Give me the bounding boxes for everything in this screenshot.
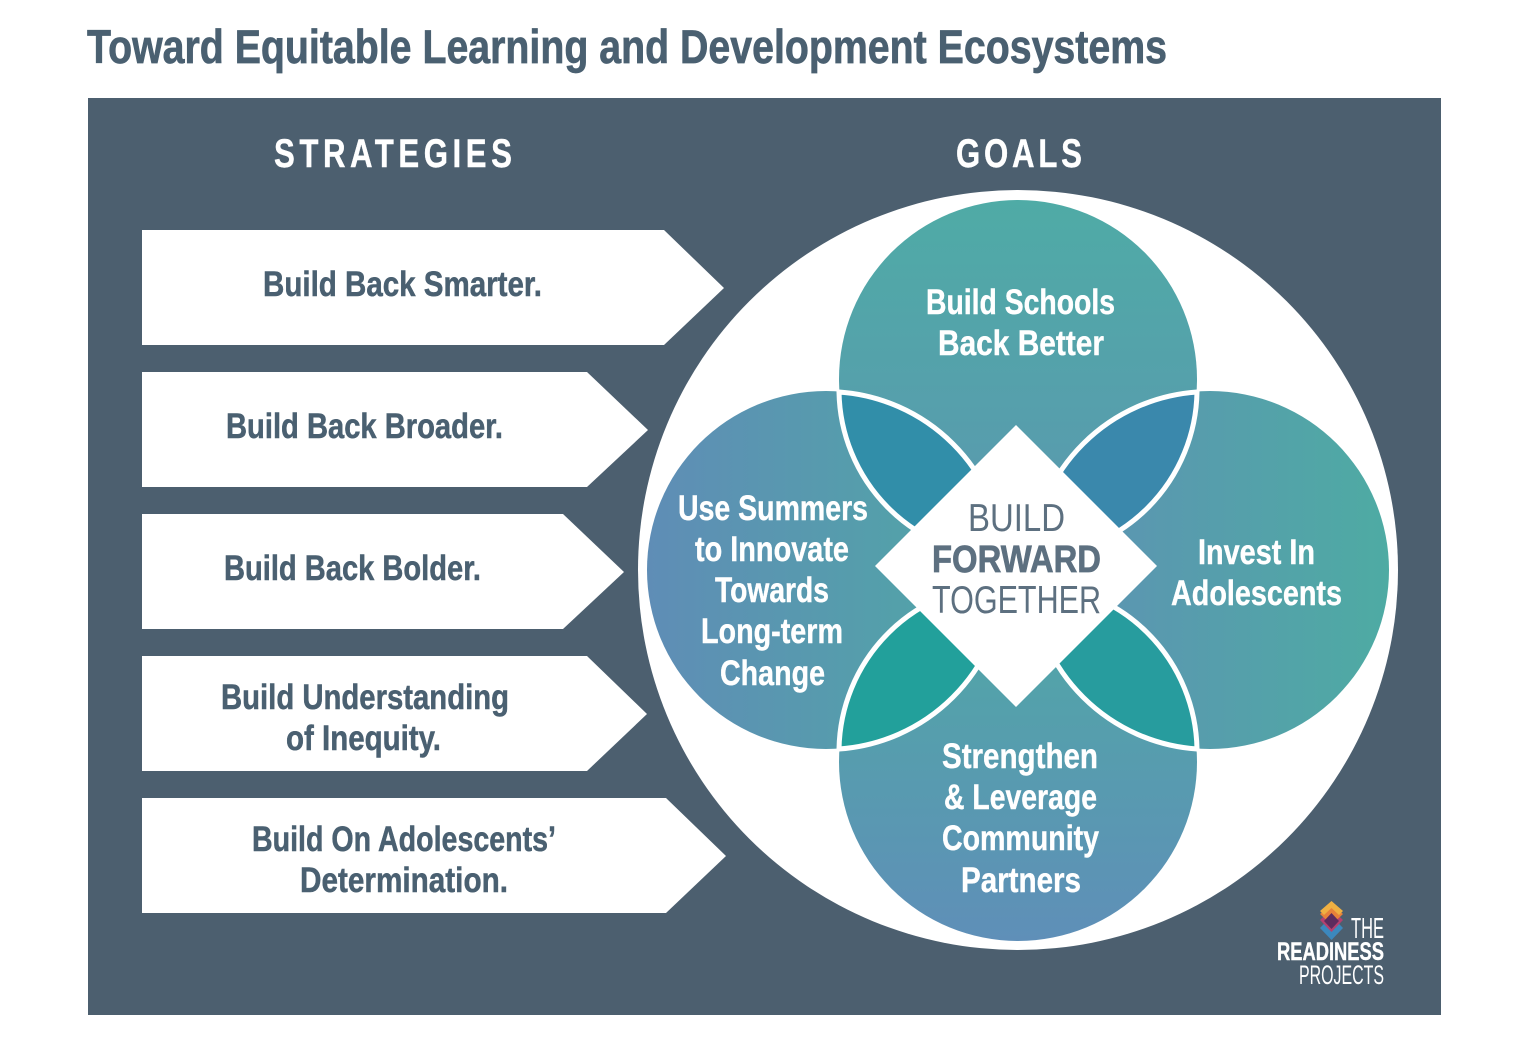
logo text: THE bbox=[1351, 913, 1384, 945]
title: Toward Equitable Learning and Development Ecosystems bbox=[87, 20, 1167, 73]
arrow: build back smarter: Build Back Smarter. bbox=[263, 265, 542, 304]
goal text: invest in adolescents bbox=[1171, 533, 1342, 613]
arrow: build back smarter bbox=[142, 230, 724, 345]
goal text: invest in adolescents: Adolescents bbox=[1171, 574, 1342, 613]
panel: dark background bbox=[88, 98, 1441, 1015]
heading: goals: GOALS bbox=[956, 131, 1082, 176]
center label bbox=[932, 497, 1101, 622]
goal text: build schools back better: Build Schools bbox=[926, 283, 1115, 322]
arrow: build back bolder bbox=[142, 514, 624, 629]
arrow: build on adolescents' determination bbox=[142, 798, 726, 913]
icon: stacked diamonds bbox=[1320, 901, 1343, 940]
goals diagram: white circle with overlapping goal circles bbox=[638, 190, 1398, 950]
goal text: build schools back better bbox=[926, 283, 1115, 363]
goal text: build schools back better: Back Better bbox=[938, 324, 1104, 363]
goal circle: right bbox=[1031, 391, 1389, 749]
goal text: use summers bbox=[678, 489, 868, 693]
goal circle: bottom bbox=[839, 583, 1197, 941]
logo text bbox=[1277, 913, 1384, 990]
arrow: build understanding of inequity: Build Understanding bbox=[221, 678, 509, 717]
arrow: build back broader bbox=[142, 372, 648, 487]
arrow: build back bolder: Build Back Bolder. bbox=[224, 549, 481, 588]
goal text: use summers: Towards bbox=[715, 571, 829, 610]
overlap: bottom right bbox=[1031, 584, 1197, 749]
logo text: PROJECTS bbox=[1299, 960, 1384, 990]
goal text: strengthen community partners: Partners bbox=[961, 861, 1081, 900]
goal text: strengthen community partners: Community bbox=[942, 819, 1099, 858]
overlap: bottom left bbox=[839, 584, 1005, 749]
overlap: top left bbox=[839, 392, 1005, 557]
arrow: build understanding of inequity: of Inequity. bbox=[286, 719, 441, 758]
arrow: build on adolescents' determination: Determination. bbox=[300, 861, 508, 900]
logo text: READINESS bbox=[1277, 938, 1384, 966]
arrow: build understanding of inequity bbox=[142, 656, 647, 771]
center diamond bbox=[875, 425, 1157, 707]
logo: the readiness projects bbox=[1277, 901, 1384, 990]
overlap: top right bbox=[1031, 392, 1197, 557]
goal text: use summers: Long-term bbox=[701, 612, 843, 651]
goal text: strengthen community partners: & Leverage bbox=[944, 778, 1097, 817]
goal text: strengthen community partners bbox=[942, 737, 1099, 900]
arrow: build back broader: Build Back Broader. bbox=[226, 407, 503, 446]
goal circle: top bbox=[839, 200, 1197, 558]
goal text: invest in adolescents: Invest In bbox=[1198, 533, 1315, 572]
goal text: strengthen community partners: Strengthen bbox=[942, 737, 1098, 776]
center label: TOGETHER bbox=[932, 579, 1101, 622]
goal text: use summers: to Innovate bbox=[695, 530, 849, 569]
outer white circle bbox=[638, 190, 1398, 950]
center label: FORWARD bbox=[932, 539, 1101, 581]
arrow: build on adolescents' determination: Build On Adolescents’ bbox=[252, 820, 556, 859]
goal circle: left bbox=[647, 391, 1005, 749]
heading: strategies: STRATEGIES bbox=[274, 131, 512, 176]
goal text: use summers: Use Summers bbox=[678, 489, 868, 528]
goal text: use summers: Change bbox=[720, 654, 825, 693]
center label: BUILD bbox=[968, 497, 1065, 540]
